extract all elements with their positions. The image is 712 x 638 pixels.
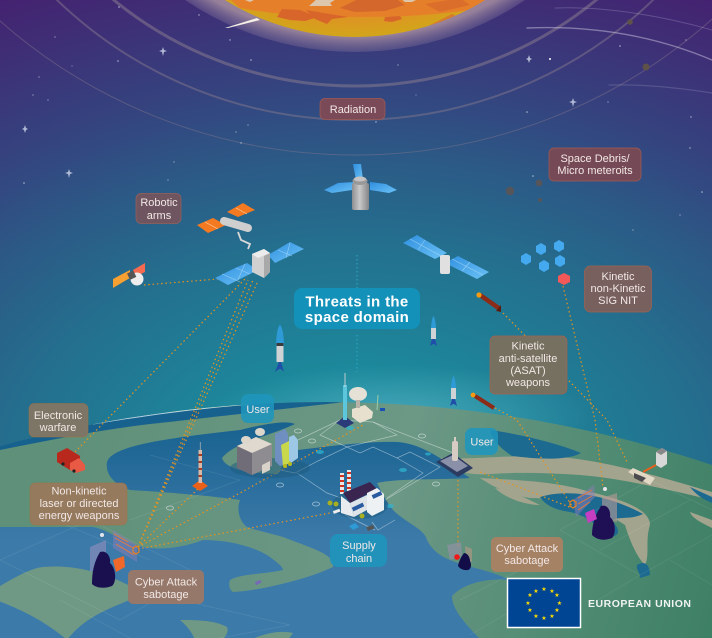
logo: EU flag: ★ [557, 600, 562, 607]
left water strip [0, 402, 343, 450]
label: user harbour [465, 428, 498, 455]
supply chain: factory [328, 470, 388, 531]
label: electronic warfare [29, 404, 88, 437]
meteor trails [527, 8, 712, 93]
label: supply chain: Supply [342, 540, 376, 552]
title: space domain [305, 309, 409, 326]
label: radiation [320, 98, 385, 120]
label: kinetic non-kinetic: Kinetic [601, 271, 635, 283]
label: user city [241, 394, 274, 423]
label: radiation: Radiation [330, 104, 376, 116]
horizon highlight [93, 404, 250, 424]
label: cyber attack left: Cyber Attack [135, 576, 198, 588]
label: user city: User [246, 404, 270, 416]
label: electronic warfare: warfare [39, 422, 76, 434]
icons: meteorites [627, 19, 650, 70]
label: kinetic ASAT: (ASAT) [510, 365, 546, 377]
label: kinetic non-kinetic [584, 266, 652, 312]
title [294, 288, 420, 329]
label: kinetic non-kinetic: non-Kinetic [590, 283, 646, 295]
label: cyber attack right: sabotage [504, 555, 550, 567]
label: space debris: Space Debris/ [560, 153, 630, 165]
network: central circuit lines [280, 420, 456, 530]
label: electronic warfare: Electronic [34, 410, 83, 422]
darker inlets [490, 430, 712, 578]
label: cyber attack right [491, 537, 563, 572]
icon: missile upper [476, 292, 501, 312]
icon: rocket lower [450, 376, 457, 406]
label: kinetic ASAT: Kinetic [511, 340, 545, 352]
icons: space debris [506, 180, 542, 202]
label: space debris [549, 148, 641, 181]
comet on sun [225, 18, 260, 28]
label: robotic arms: arms [147, 210, 172, 222]
label: supply chain: chain [346, 553, 372, 565]
logo: EU flag: ★ [533, 588, 539, 595]
logo: EU flag: ★ [554, 592, 560, 599]
satellite: top [324, 164, 397, 210]
network: nodes [72, 429, 440, 522]
earth [0, 390, 712, 638]
ground station: antenna tower and dish [336, 373, 385, 428]
logo: EU flag [508, 578, 580, 628]
sun [185, 0, 525, 52]
satellite: robotic arm [197, 203, 255, 249]
satellite: right [403, 235, 489, 279]
satellite: small left [113, 263, 145, 288]
vertical signal line [356, 255, 358, 372]
satellite: main with blue panels [215, 242, 304, 285]
icon: small object on tongue [255, 580, 262, 585]
radiation rings [0, 0, 712, 155]
tower: left [192, 442, 208, 491]
logo: EU flag: ★ [549, 613, 555, 620]
logo: EU flag: ★ [527, 607, 533, 614]
logo: EU flag: ★ [554, 607, 560, 614]
logo: EU flag: ★ [527, 592, 533, 599]
label: kinetic non-kinetic: SIG NIT [598, 295, 638, 307]
main water [0, 422, 510, 638]
icon: red truck [57, 448, 85, 473]
logo: EU flag: ★ [525, 600, 531, 607]
stars [22, 6, 703, 231]
hacker: small [447, 542, 472, 570]
label: non-kinetic laser [30, 483, 127, 525]
label: user harbour: User [470, 436, 494, 448]
label: kinetic ASAT: anti-satellite [499, 353, 557, 365]
label: kinetic ASAT: weapons [505, 377, 551, 389]
label: non-kinetic laser: energy weapons [39, 510, 120, 522]
islands [0, 567, 293, 638]
label: kinetic ASAT [490, 336, 567, 394]
hacker: left [90, 530, 139, 588]
dotted attack lines [72, 277, 627, 549]
network: faint grid [0, 455, 712, 638]
icon: missile lower [471, 393, 494, 408]
label: non-kinetic laser: Non-kinetic [51, 486, 107, 498]
logo: EU flag: ★ [533, 613, 539, 620]
label: cyber attack left [128, 570, 204, 604]
label: robotic arms [136, 194, 181, 224]
title: Threats in the [305, 294, 409, 310]
logo: EU flag: ★ [541, 586, 547, 593]
label: supply chain [330, 534, 387, 567]
hacker: right [570, 485, 617, 540]
label: robotic arms: Robotic [140, 197, 178, 209]
logo: EU flag: ★ [549, 588, 555, 595]
label: cyber attack right: Cyber Attack [496, 543, 559, 555]
icon: red hexagon [558, 273, 570, 285]
tan land band [428, 456, 712, 565]
logo text: European Union: EUROPEAN UNION [588, 598, 691, 610]
icons: blue hexagon constellation [521, 240, 565, 272]
label: cyber attack left: sabotage [143, 589, 189, 601]
label: non-kinetic laser: laser or directed [40, 498, 118, 510]
user: harbour with rocket [436, 437, 473, 477]
icon: rocket left [275, 325, 284, 372]
icon: rocket middle [430, 316, 437, 346]
ground station: right with pad [628, 448, 667, 485]
user: city buildings [230, 428, 310, 478]
label: space debris: Micro meteroits [557, 165, 633, 177]
logo: EU flag: ★ [541, 615, 547, 622]
